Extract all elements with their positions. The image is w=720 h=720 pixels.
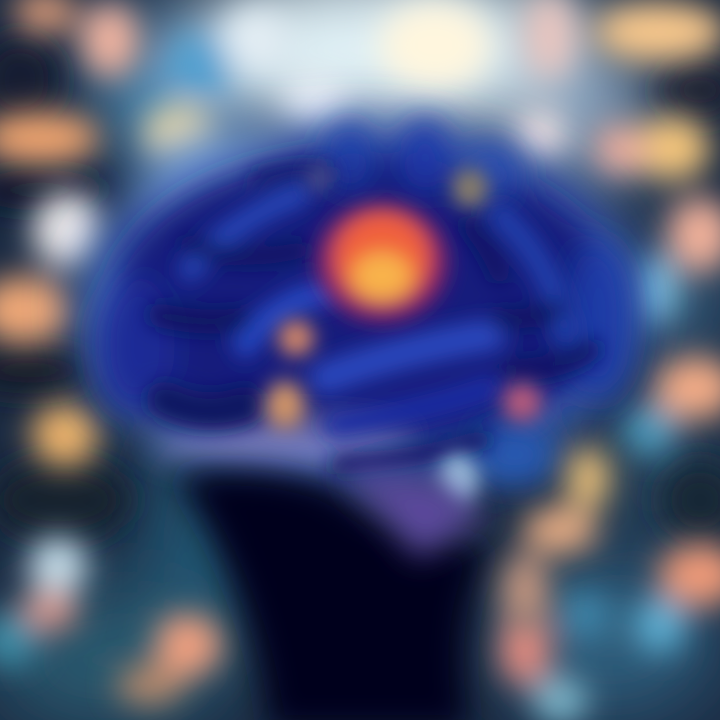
brain glowing core <box>316 202 448 322</box>
background dark bands <box>0 35 720 540</box>
brain body <box>95 119 632 487</box>
brain small lights <box>265 166 542 506</box>
brain folds <box>160 173 590 465</box>
neck silhouette <box>175 470 490 720</box>
brain outer glow <box>80 125 640 485</box>
right-side warm streak <box>501 446 610 628</box>
neck collar highlight <box>340 470 490 560</box>
